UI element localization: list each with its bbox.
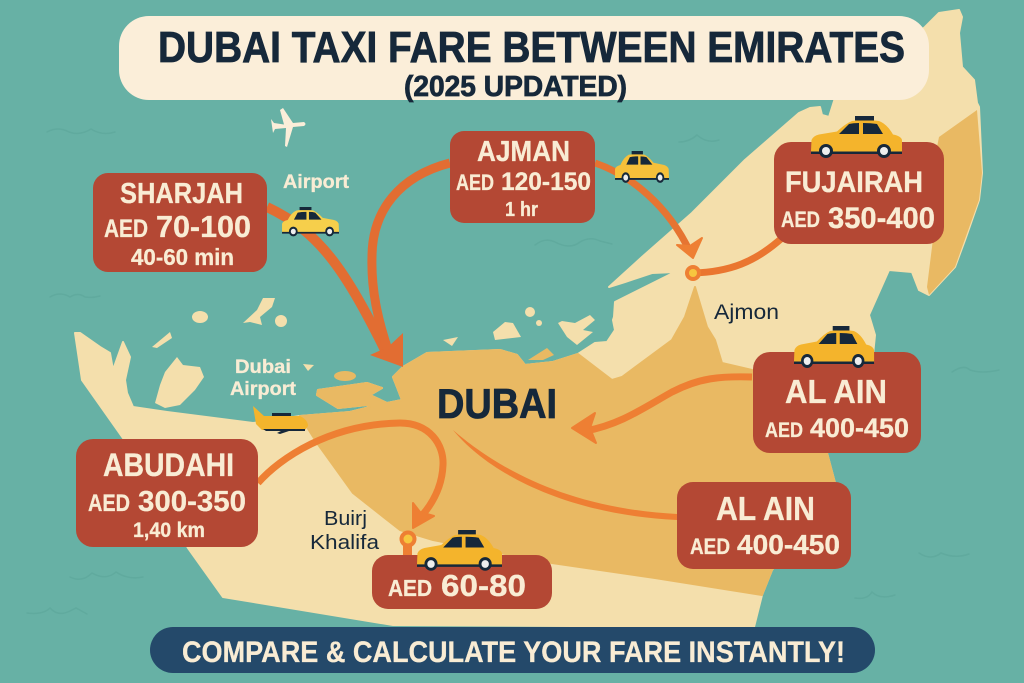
panel: Sharjah: 70-100 [156,209,251,244]
panel: Abu Dhabi: 1,40 km [133,519,205,542]
icon: Sharjah taxi [282,207,339,236]
label: Dubai Airport: Dubai [235,357,291,378]
islands [152,298,595,408]
panel: Sharjah: AED [104,215,148,243]
label: Burj Khalifa: Buirj [324,508,367,530]
panel: Al Ain east: 400-450 [810,413,909,443]
panel: Al Ain east: AED [765,419,803,442]
label: Burj Khalifa: Khalifa [310,532,380,554]
label: Dubai Airport [230,357,297,400]
dark islands [334,348,554,381]
icon: Ajman taxi [615,151,669,183]
sea waves [27,129,999,614]
label: Dubai: DUBAI [437,380,557,427]
panel: Fujairah [774,142,944,244]
panel: Dubai local fare: 60-80 [441,568,526,603]
panel: Abu Dhabi: 300-350 [138,486,246,518]
icon: Al Ain taxi [794,326,874,368]
label: Airport: Airport [283,172,350,193]
arrow: Ajman to Dubai [372,163,450,350]
panel: Fujairah: FUJAIRAH [785,166,923,199]
panel: Al Ain south [677,482,851,569]
panel: Abu Dhabi: AED [88,490,130,517]
panel: Al Ain south: 400-450 [737,529,840,560]
panel: Abu Dhabi [76,439,258,547]
panel: Al Ain east [753,352,921,453]
label: Burj Khalifa [310,508,380,554]
icon: Dubai taxi [417,530,502,571]
panel: Ajman: 1 hr [505,199,538,221]
land: eastern darker strip [927,110,982,295]
panel: Fujairah: AED [781,207,820,232]
panel: Sharjah: 40-60 min [131,244,234,270]
arrow: Sharjah to Dubai [267,207,403,367]
title panel [119,16,929,103]
arrow: Al Ain to Dubai [572,377,752,443]
label: Ajmon: Ajmon [714,301,779,324]
panel: Ajman: AJMAN [477,136,570,168]
pin: Ajmon junction [685,265,701,281]
pin: Burj Khalifa [400,530,416,556]
panel: Fujairah: 350-400 [828,202,935,235]
panel: Ajman [450,131,595,223]
icon: yellow airplane [253,406,308,434]
panel: Sharjah: SHARJAH [120,178,243,210]
land: Dubai darker area [300,287,835,595]
icon: white airplane [271,108,306,147]
arrow: Ajman to pin [595,163,702,258]
arrow: Abu Dhabi to Burj Khalifa [258,423,443,528]
arrow: Al Ain south to Dubai [453,430,677,520]
icon: Fujairah taxi [811,116,902,158]
arrow: Fujairah to pin [693,238,782,273]
panel: Abu Dhabi: ABUDAHI [103,447,234,483]
subtitle: (2025 UPDATED) [404,71,627,103]
panel: Ajman: 120-150 [501,168,591,196]
panel: Ajman: AED [456,170,494,195]
panel: Al Ain south: AED [690,534,730,559]
panel: Al Ain south: AL AIN [716,490,815,527]
panel: Dubai local fare: AED [388,575,432,601]
label: Dubai Airport: Airport [230,379,297,400]
call to action banner: COMPARE & CALCULATE YOUR FARE INSTANTLY! [182,636,845,669]
panel: Al Ain east: AL AIN [785,373,887,410]
call to action banner [150,627,875,673]
panel: Sharjah [93,173,267,272]
panel: Dubai local fare [372,555,552,609]
title: DUBAI TAXI FARE BETWEEN EMIRATES [158,23,905,72]
